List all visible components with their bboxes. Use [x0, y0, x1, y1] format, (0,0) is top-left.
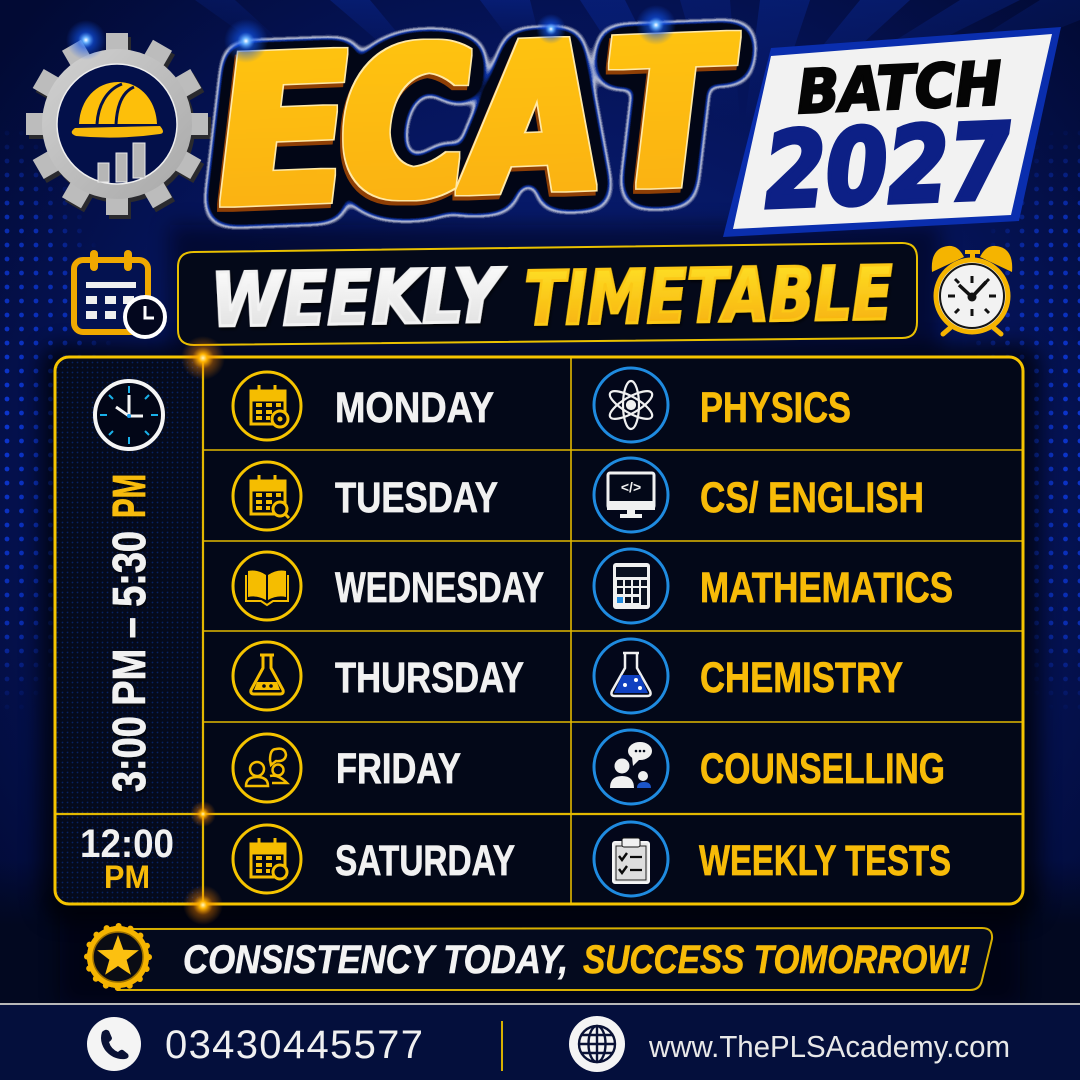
BATCH text: BATCH — [796, 49, 1003, 128]
subject: CS / English: CS/ ENGLISH — [700, 474, 924, 522]
divider — [501, 1021, 503, 1071]
subject: Weekly tests: WEEKLY TESTS — [699, 837, 951, 885]
footer — [0, 1003, 1080, 1080]
row: Wednesday: WEDNESDAY — [335, 564, 544, 612]
row: Monday — [233, 372, 494, 440]
time: 12:00 PM: 12:00 — [80, 822, 174, 866]
subject: Physics: PHYSICS — [700, 384, 851, 432]
row: Thursday: THURSDAY — [335, 654, 524, 702]
row: Tuesday — [233, 462, 498, 530]
subject: Mathematics — [594, 549, 953, 623]
title: ECAT — [203, 0, 740, 254]
subject: Chemistry: CHEMISTRY — [700, 654, 903, 702]
subject: Physics — [594, 368, 851, 442]
icon: building bars — [98, 143, 145, 182]
time: 3:00 PM – 5:30 PM: 3:00 PM – 5:30 — [103, 531, 155, 792]
time: 3:00 PM – 5:30 PM: PM — [103, 474, 155, 518]
timetable panel — [55, 357, 1023, 904]
row: Saturday — [233, 825, 515, 893]
badge: BATCH 2027 — [723, 27, 1061, 237]
tagline bar — [87, 926, 992, 990]
subject: Weekly tests — [594, 822, 951, 896]
subject: Counselling: COUNSELLING — [700, 745, 945, 793]
2027 text: 2027 — [762, 101, 1013, 232]
phone number: 03430445577 — [165, 1023, 423, 1067]
icon: alarm clock — [932, 246, 1012, 334]
row: Friday: FRIDAY — [336, 745, 461, 793]
row: Saturday: SATURDAY — [335, 837, 515, 885]
icon: phone — [87, 1017, 141, 1071]
heading bar: weekly timetable — [178, 243, 917, 345]
subject: Mathematics: MATHEMATICS — [700, 564, 953, 612]
icon: wall clock — [95, 381, 163, 449]
WEEKLY text: WEEKLY — [210, 253, 507, 344]
subject: Chemistry — [594, 639, 903, 713]
logo: gear with hard hat — [26, 33, 211, 219]
title: ECAT: A — [455, 0, 614, 242]
time: 12:00 PM — [80, 822, 174, 895]
icon: globe — [569, 1016, 625, 1072]
subject: CS / English — [594, 458, 924, 532]
TIMETABLE text: TIMETABLE — [524, 251, 893, 342]
title: ECAT: E — [203, 9, 362, 254]
icon: hard hat — [72, 82, 163, 138]
subject: CS / English: </> — [621, 479, 641, 495]
tagline gold text: SUCCESS TOMORROW! — [583, 938, 970, 982]
icon: star badge — [87, 926, 149, 988]
title: ECAT: C — [327, 2, 482, 247]
row: Thursday — [233, 642, 524, 710]
time column — [56, 358, 203, 904]
subject: Counselling — [594, 730, 945, 804]
time: 12:00 PM: PM — [104, 859, 150, 895]
glow sparks — [66, 5, 676, 925]
row: Monday: MONDAY — [335, 384, 494, 432]
website: www.ThePLSAcademy.com — [648, 1029, 1010, 1064]
icon: calendar with clock — [74, 250, 165, 337]
row: Wednesday — [233, 552, 544, 620]
tagline white text: CONSISTENCY TODAY, — [183, 938, 568, 982]
grid lines — [55, 357, 1023, 904]
row: Tuesday: TUESDAY — [335, 474, 498, 522]
row: Friday — [233, 734, 461, 802]
